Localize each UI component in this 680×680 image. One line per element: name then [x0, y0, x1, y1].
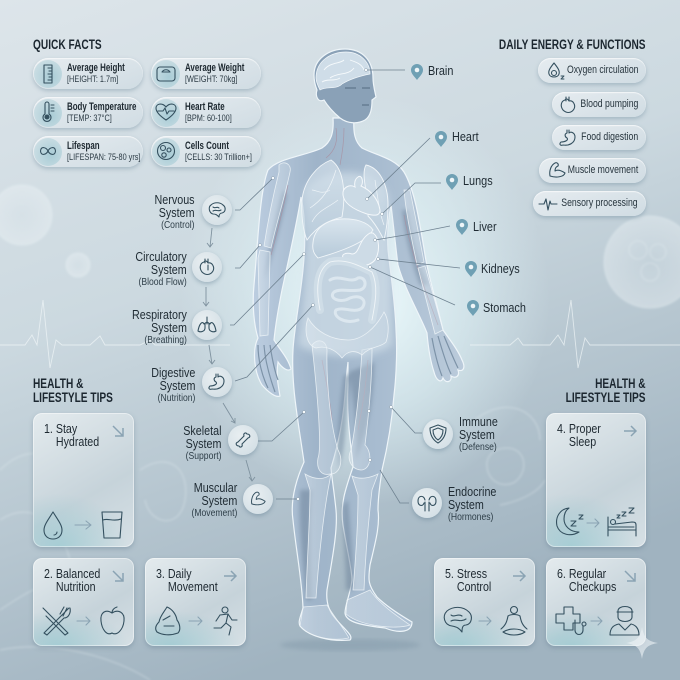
card: balanced nutrition [33, 558, 134, 646]
fact: cells count [151, 136, 261, 167]
organ label: Lungs: Lungs [463, 174, 493, 188]
respiratory label: Respiratory [132, 308, 187, 322]
heading: health tips right: LIFESTYLE TIPS [566, 390, 646, 405]
system: respiratory [132, 308, 224, 346]
endocrine icon [412, 488, 442, 518]
fact: average height [33, 58, 143, 89]
circulatory icon [192, 252, 222, 282]
card: balanced nutrition: 2. Balanced [44, 566, 100, 581]
muscular label: System [201, 494, 237, 508]
function: sensory processing [533, 191, 646, 216]
card: daily movement [145, 558, 246, 646]
function: blood pumping: Blood pumping [580, 98, 638, 110]
digestive label: System [159, 379, 195, 393]
arrows between systems [203, 228, 255, 481]
heading: health tips right: HEALTH & [596, 376, 646, 391]
system: nervous [155, 193, 234, 231]
immune label: Immune [459, 415, 498, 429]
fact: average weight [151, 58, 261, 89]
card: stay hydrated: Hydrated [56, 434, 99, 448]
fact: average height: [HEIGHT: 1.7m] [67, 74, 118, 85]
function: muscle movement: Muscle movement [567, 164, 638, 176]
organ label: Kidneys: Kidneys [481, 262, 520, 276]
system: muscular [191, 481, 274, 519]
intestines [318, 261, 376, 321]
digestive label [151, 366, 195, 404]
function: oxygen circulation [538, 58, 646, 83]
circulatory label [136, 250, 187, 288]
skeletal label: (Support) [185, 451, 221, 462]
card: proper sleep [546, 413, 646, 547]
system: circulatory [136, 250, 224, 288]
organ label: Stomach: Stomach [483, 301, 526, 315]
skeletal icon [228, 425, 258, 455]
panel: quick facts pills [31, 58, 263, 171]
card: proper sleep: Sleep [569, 434, 596, 448]
card: stay hydrated: 1. Stay [44, 421, 77, 436]
icons: food to runner [155, 606, 238, 636]
fact: average weight: [WEIGHT: 70kg] [185, 74, 237, 85]
fact: body temperature [33, 97, 143, 128]
organ label: Liver: Liver [473, 220, 497, 234]
immune icon [423, 419, 453, 449]
liver and stomach [313, 219, 373, 258]
body silhouette [253, 118, 464, 640]
card: regular checkups: 6. Regular [557, 566, 606, 581]
brain [316, 52, 370, 90]
heading: health tips left: HEALTH & [33, 376, 83, 391]
function: oxygen circulation: Oxygen circulation [567, 64, 638, 76]
digestive icon [202, 367, 232, 397]
heart [343, 176, 380, 215]
heading: daily energy and functions: DAILY ENERGY & FUNCTIONS [499, 37, 646, 52]
icons: brain to meditation [444, 606, 528, 636]
fact: cells count: Cells Count [185, 140, 229, 152]
card: regular checkups: Checkups [569, 578, 616, 594]
icons: drop to glass [43, 511, 123, 540]
circulatory label: (Blood Flow) [139, 277, 187, 288]
nervous label: (Control) [162, 220, 195, 231]
endocrine label: Endocrine [448, 485, 496, 499]
fact: heart rate: [BPM: 60-100] [185, 113, 232, 124]
digestive label: Digestive [151, 366, 195, 380]
location pins [411, 64, 479, 316]
system: digestive [151, 366, 234, 404]
digestive label: (Nutrition) [157, 393, 195, 404]
circulatory label: System [151, 263, 187, 277]
endocrine label: (Hormones) [448, 512, 493, 523]
card: stress control [434, 558, 535, 646]
muscular label: Muscular [193, 481, 237, 495]
nervous label: Nervous [155, 193, 195, 207]
circulatory label: Circulatory [136, 250, 187, 264]
card: balanced nutrition: Nutrition [56, 578, 96, 594]
icons: moon to bed [556, 508, 637, 536]
function: blood pumping [552, 92, 646, 117]
respiratory label [132, 308, 187, 346]
card: regular checkups [546, 558, 646, 646]
card: daily movement: 3. Daily [156, 566, 192, 581]
skeletal label: Skeletal [183, 424, 221, 438]
fingers [258, 336, 458, 392]
card: stress control: 5. Stress [445, 566, 487, 581]
fact: cells count: [CELLS: 30 Trillion+] [185, 152, 252, 163]
muscular label: (Movement) [191, 508, 237, 519]
organ label: Heart: Heart [452, 130, 479, 144]
card: stay hydrated [33, 413, 134, 547]
endocrine label: System [448, 498, 484, 512]
nervous label: System [159, 206, 195, 220]
endocrine label [448, 485, 496, 523]
nervous icon [202, 195, 232, 225]
fact: lifespan: [LIFESPAN: 75-80 yrs] [67, 152, 140, 163]
card: proper sleep: 4. Proper [557, 421, 601, 436]
function: muscle movement [539, 158, 646, 183]
fact: heart rate [151, 97, 261, 128]
heading: health tips left [33, 376, 113, 405]
heading: health tips left: LIFESTYLE TIPS [33, 390, 113, 405]
fact: average height: Average Height [67, 62, 125, 74]
icons: cutlery to apple [42, 606, 125, 636]
leader lines [230, 70, 460, 503]
organ label: Brain: Brain [428, 64, 453, 78]
system: skeletal [183, 424, 260, 462]
fact: average weight: Average Weight [185, 62, 244, 74]
fact: lifespan: Lifespan [67, 140, 100, 152]
muscular label [191, 481, 238, 519]
fact: heart rate: Heart Rate [185, 101, 225, 113]
skeletal label [183, 424, 221, 462]
heading: health tips right [566, 376, 646, 405]
system: immune [421, 415, 498, 453]
immune label: System [459, 428, 495, 442]
heading: quick facts: QUICK FACTS [33, 37, 102, 52]
fact: body temperature: Body Temperature [67, 101, 136, 113]
card: daily movement: Movement [168, 578, 218, 594]
respiratory label: System [151, 321, 187, 335]
function: food digestion: Food digestion [581, 131, 638, 143]
muscular icon [243, 484, 273, 514]
veins [271, 128, 438, 430]
fact: body temperature: [TEMP: 37°C] [67, 113, 112, 124]
skeletal label: System [185, 437, 221, 451]
fact: lifespan [33, 136, 143, 167]
nervous label [155, 193, 195, 231]
function: sensory processing: Sensory processing [562, 197, 638, 209]
panel: daily energy pills [532, 58, 648, 220]
respiratory label: (Breathing) [144, 335, 187, 346]
immune label [459, 415, 498, 453]
torso translucent highlight [298, 172, 392, 356]
function: food digestion [552, 125, 646, 150]
icons: medical cross to doctor [555, 606, 640, 636]
card: stress control: Control [457, 578, 491, 594]
respiratory icon [192, 310, 222, 340]
limb shading [265, 190, 428, 600]
immune label: (Defense) [459, 442, 497, 453]
decorative sparkle [628, 628, 658, 658]
lungs [302, 160, 388, 240]
skeleton bones [258, 163, 443, 639]
system: endocrine [410, 485, 496, 523]
head [314, 49, 376, 123]
